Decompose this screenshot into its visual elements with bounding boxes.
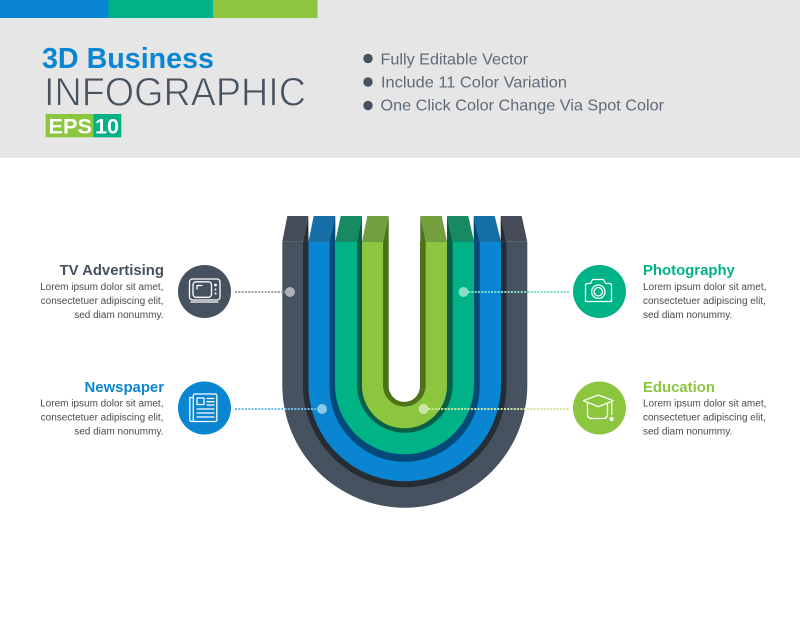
band: light green bbox=[362, 242, 447, 428]
icon: graduation cap bbox=[573, 382, 626, 434]
band: grey bbox=[282, 242, 527, 508]
text: Photography bbox=[643, 263, 766, 321]
text: TV Advertising: sed diam nonummy. bbox=[74, 310, 164, 321]
top faces bbox=[282, 216, 527, 242]
3D U chart bbox=[282, 215, 527, 508]
text: Education: Education bbox=[643, 380, 715, 396]
band: blue bbox=[308, 242, 501, 481]
badge: EPS10: EPS bbox=[48, 115, 92, 138]
connector: TV Advertising bbox=[235, 287, 295, 297]
title: INFOGRAPHIC: INFOGRAPHIC bbox=[44, 70, 306, 114]
centre cut-out bbox=[389, 215, 420, 402]
text: Newspaper: sed diam nonummy. bbox=[74, 426, 164, 438]
text: Newspaper bbox=[40, 380, 164, 438]
icon: camera bbox=[573, 265, 626, 318]
colour strip bbox=[0, 0, 318, 18]
badge: EPS10 bbox=[46, 114, 121, 138]
icon: newspaper bbox=[178, 382, 231, 434]
text: Photography: Photography bbox=[643, 263, 736, 279]
text: TV Advertising bbox=[40, 263, 164, 321]
text: Education: Lorem ipsum dolor sit amet, bbox=[643, 398, 766, 410]
feature list: Include 11 Color Variation bbox=[381, 74, 567, 92]
text: Newspaper: consectetuer adipiscing elit, bbox=[41, 412, 164, 424]
text: Education: consectetuer adipiscing elit, bbox=[643, 412, 766, 424]
text: Photography: Lorem ipsum dolor sit amet, bbox=[643, 282, 766, 293]
feature list: Fully Editable Vector bbox=[380, 52, 529, 68]
title: 3D Business: 3D Business bbox=[42, 43, 214, 75]
band: green bbox=[335, 242, 474, 454]
text: Photography: sed diam nonummy. bbox=[643, 310, 732, 321]
connector: Education bbox=[418, 404, 570, 414]
text: TV Advertising: TV Advertising bbox=[59, 263, 164, 279]
text: Newspaper: Lorem ipsum dolor sit amet, bbox=[40, 398, 164, 410]
text: Newspaper: Newspaper bbox=[85, 380, 164, 396]
text: Education: sed diam nonummy. bbox=[643, 426, 732, 438]
header panel bbox=[0, 0, 800, 158]
icon: TV bbox=[178, 265, 231, 318]
feature list: One Click Color Change Via Spot Color bbox=[380, 98, 665, 114]
text: Photography: consectetuer adipiscing elit, bbox=[643, 296, 766, 307]
connector: Photography bbox=[458, 287, 570, 297]
text: TV Advertising: consectetuer adipiscing elit, bbox=[41, 296, 164, 307]
connector: Newspaper bbox=[235, 404, 327, 414]
feature list bbox=[363, 52, 665, 114]
badge: EPS10: 10 bbox=[95, 115, 119, 138]
text: TV Advertising: Lorem ipsum dolor sit amet, bbox=[40, 282, 164, 293]
text: Education bbox=[643, 380, 766, 438]
